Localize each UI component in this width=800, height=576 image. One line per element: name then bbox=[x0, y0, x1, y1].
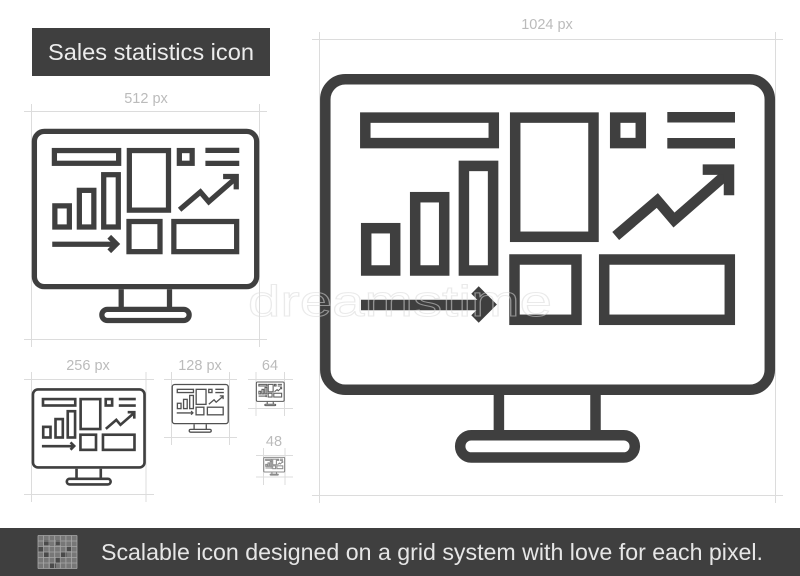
icon: monitor 48 px bbox=[264, 457, 285, 475]
footer bar bbox=[0, 528, 800, 576]
dimension label: 128 px: 128 px bbox=[178, 358, 223, 374]
icon: monitor 128 px bbox=[172, 385, 228, 432]
icon: monitor 64 px bbox=[256, 382, 284, 406]
dimension frame: 64 bbox=[248, 358, 293, 416]
icon: monitor 1024 px bbox=[325, 79, 770, 458]
dimension label: 256 px: 256 px bbox=[66, 358, 111, 374]
title banner bbox=[32, 28, 270, 76]
icon: monitor 512 px bbox=[34, 131, 257, 320]
dimension label: 512 px: 512 px bbox=[124, 91, 169, 107]
dimension frame: 128 px bbox=[164, 358, 237, 445]
dimension label: 1024 px: 1024 px bbox=[521, 17, 574, 33]
watermark: dreamstime bbox=[248, 277, 552, 326]
dimension frame: 48 bbox=[256, 434, 293, 485]
icon: pixel grid bbox=[38, 536, 77, 568]
footer text: Scalable icon designed on a grid system with love for each pixel. bbox=[101, 539, 763, 565]
dimension label: 48: 48 bbox=[266, 434, 282, 450]
icon: monitor 256 px bbox=[33, 389, 145, 484]
dimension frame: 256 px bbox=[24, 358, 154, 502]
dimension frame: 512 px bbox=[24, 91, 267, 347]
dimension label: 64: 64 bbox=[262, 358, 278, 374]
title text: Sales statistics icon bbox=[48, 39, 254, 65]
